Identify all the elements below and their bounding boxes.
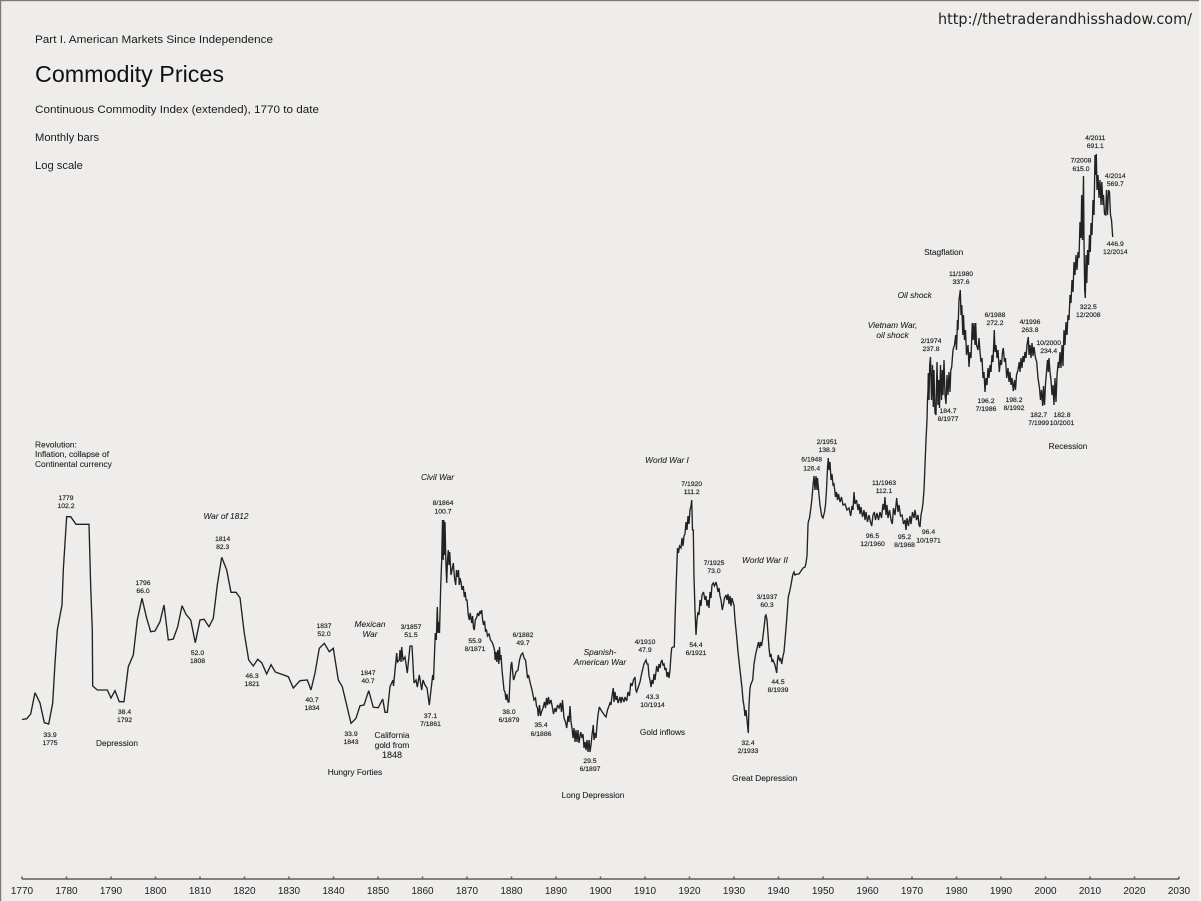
low label 2008 <box>1076 304 1101 319</box>
x axis: 1800 <box>144 886 167 897</box>
peak label 1948: 126.4 <box>803 466 820 472</box>
low label 1871 <box>465 638 486 653</box>
low label 1977: 8/1977 <box>938 416 959 423</box>
annotation: california gold <box>374 730 410 760</box>
low label 1999 <box>1028 412 1049 427</box>
peak label 1988: 6/1988 <box>985 312 1006 319</box>
peak label 1882: 49.7 <box>516 640 530 647</box>
low label 1977 <box>938 408 959 423</box>
peak label 1988: 272.2 <box>986 320 1004 327</box>
series label: Part I. American Markets Since Independence <box>35 34 273 46</box>
annotation: revolution: Revolution: <box>35 439 77 449</box>
x axis: 2020 <box>1123 886 1146 897</box>
peak label 1779 <box>57 495 75 510</box>
bar frequency note: Monthly bars <box>35 132 99 144</box>
annotation: vietnam war: Vietnam War, <box>868 320 917 330</box>
x axis: 1930 <box>723 886 746 897</box>
peak label 1948 <box>801 456 822 472</box>
peak label 1974 <box>921 338 942 353</box>
peak label 1937: 3/1937 <box>757 594 778 601</box>
peak label 2008: 7/2008 <box>1071 158 1092 164</box>
peak label 1937 <box>757 594 778 609</box>
peak label 1814 <box>215 536 230 551</box>
annotation: recession: Recession <box>1049 441 1088 451</box>
low label 1999: 7/1999 <box>1028 420 1049 427</box>
peak label 1882: 6/1882 <box>513 632 534 639</box>
annotation: revolution: Inflation, collapse of <box>35 449 110 459</box>
low label 1977: 184.7 <box>939 408 957 415</box>
peak label 1996: 4/1996 <box>1020 319 1041 326</box>
peak label 1864: 8/1864 <box>433 500 454 507</box>
peak label 2000: 10/2000 <box>1036 340 1061 347</box>
low label 1834: 1834 <box>304 705 320 712</box>
annotation: vietnam war <box>868 320 917 340</box>
last value label 2014: 446.9 <box>1107 241 1124 248</box>
last value label 2014 <box>1103 241 1128 256</box>
annotation: depression: Depression <box>96 738 138 748</box>
peak label 1910: 47.9 <box>638 647 652 654</box>
low label 2008: 322.5 <box>1080 304 1097 311</box>
low label 1843 <box>343 731 359 746</box>
x axis: 1950 <box>812 886 835 897</box>
annotation: mexican war: War <box>362 629 379 639</box>
annotation: mexican war <box>355 619 386 639</box>
low label 1999: 182.7 <box>1030 412 1047 419</box>
low label 1843: 1843 <box>343 739 359 746</box>
low label 1960: 96.5 <box>866 533 879 540</box>
low label 1843: 33.9 <box>344 731 358 738</box>
low label 1897: 29.5 <box>583 758 597 765</box>
low label 1871: 55.9 <box>468 638 482 645</box>
peak label 1847: 1847 <box>360 670 376 677</box>
x axis: 1980 <box>945 886 968 897</box>
x axis: 1790 <box>100 886 123 897</box>
low label 1914: 10/1914 <box>640 702 665 709</box>
peak label 1837 <box>316 623 332 638</box>
low label 1986 <box>976 398 997 413</box>
low label 1792: 38.4 <box>118 709 131 716</box>
low label 2001 <box>1050 412 1074 427</box>
low label 1968: 95.2 <box>898 534 911 541</box>
low label 1886: 6/1886 <box>531 731 552 738</box>
x axis: 1830 <box>278 886 301 897</box>
x axis: 1900 <box>589 886 612 897</box>
last value label 2014: 12/2014 <box>1103 249 1128 256</box>
low label 1808: 52.0 <box>191 650 204 657</box>
peak label 1882 <box>513 632 534 647</box>
annotation: spanish-american war: Spanish- <box>584 647 617 657</box>
peak label 1837: 1837 <box>316 623 332 630</box>
low label 1897: 6/1897 <box>580 766 601 773</box>
low label 1861 <box>420 713 441 728</box>
peak label 2014: 4/2014 <box>1105 173 1126 180</box>
low label 1986: 7/1986 <box>976 406 997 413</box>
annotation: spanish-american war <box>573 647 627 667</box>
low label 1834: 40.7 <box>305 697 319 704</box>
subtitle: Continuous Commodity Index (extended), 1770 to date <box>35 104 319 116</box>
peak label 1857: 51.5 <box>404 632 418 639</box>
peak label 1974: 237.8 <box>922 346 940 353</box>
low label 1921: 6/1921 <box>686 650 707 657</box>
peak label 2014 <box>1105 173 1126 188</box>
low label 1992: 198.2 <box>1005 397 1023 404</box>
x axis: 1850 <box>367 886 390 897</box>
low label 1939: 44.5 <box>771 679 785 686</box>
low label 1821 <box>244 673 260 688</box>
annotation: stagflation: Stagflation <box>924 247 964 257</box>
x axis <box>11 876 1191 897</box>
low label 1775 <box>42 732 58 747</box>
peak label 2000: 234.4 <box>1040 348 1057 355</box>
low label 1775: 33.9 <box>43 732 57 739</box>
peak label 1948: 6/1948 <box>801 456 822 464</box>
source url: http://thetraderandhisshadow.com/ <box>938 10 1193 28</box>
peak label 1864: 100.7 <box>434 508 452 516</box>
annotation: hungry forties: Hungry Forties <box>328 767 382 777</box>
low label 1933: 2/1933 <box>738 748 759 755</box>
x axis: 1780 <box>55 886 78 897</box>
low label 1897 <box>580 758 601 773</box>
peak label 2008: 615.0 <box>1072 166 1090 173</box>
annotation: revolution <box>35 439 113 469</box>
peak label 1910 <box>635 639 656 654</box>
low label 1821: 1821 <box>244 681 260 688</box>
peak label 1963: 112.1 <box>876 488 892 495</box>
x axis: 1970 <box>901 886 924 897</box>
annotation: world war i: World War I <box>645 455 690 465</box>
annotation: vietnam war: oil shock <box>876 330 909 340</box>
x axis: 2030 <box>1168 886 1191 897</box>
header block <box>35 34 319 172</box>
low label 1792 <box>117 709 132 724</box>
x axis: 2010 <box>1079 886 1102 897</box>
peak label 1796: 66.0 <box>136 588 150 595</box>
peak label 2011: 4/2011 <box>1085 135 1106 142</box>
low label 1968: 8/1968 <box>894 542 915 549</box>
peak label 1814: 82.3 <box>216 544 230 551</box>
low label 1792: 1792 <box>117 717 132 724</box>
low label 1986: 196.2 <box>977 398 995 405</box>
low label 1871: 8/1871 <box>465 646 486 653</box>
annotation: revolution: Continental currency <box>35 459 113 469</box>
x axis: 1910 <box>634 886 657 897</box>
annotation: california gold: gold from <box>375 740 409 750</box>
peak label 1951 <box>817 439 838 454</box>
low label 1861: 7/1861 <box>420 721 441 728</box>
annotation: california gold: California <box>374 730 410 740</box>
x axis: 1890 <box>545 886 568 897</box>
peak label 1847: 40.7 <box>361 678 375 685</box>
peak label 1814: 1814 <box>215 536 230 543</box>
x axis: 1990 <box>990 886 1013 897</box>
peak label 1937: 60.3 <box>760 602 774 609</box>
x axis: 1940 <box>767 886 790 897</box>
low label 1914 <box>640 694 665 709</box>
low label 1886: 35.4 <box>534 722 548 729</box>
peak label 1920: 7/1920 <box>681 481 702 488</box>
low label 1971: 96.4 <box>922 529 935 536</box>
low label 1939: 8/1939 <box>768 687 789 694</box>
low label 2001: 10/2001 <box>1050 420 1074 427</box>
peak label 1857: 3/1857 <box>401 624 422 631</box>
peak label 1779: 1779 <box>58 495 74 502</box>
low label 2001: 182.8 <box>1053 412 1071 419</box>
peak label 1925: 73.0 <box>707 568 721 575</box>
annotation: mexican war: Mexican <box>355 619 386 629</box>
x axis: 1840 <box>322 886 345 897</box>
peak label 1796 <box>135 580 151 595</box>
low label 1861: 37.1 <box>424 713 437 720</box>
peak label 1951: 138.3 <box>818 447 836 454</box>
low label 1879 <box>499 709 520 724</box>
low label 1992: 8/1992 <box>1004 405 1025 412</box>
low label 1886 <box>531 722 552 738</box>
low label 1992 <box>1004 397 1025 412</box>
low label 1960: 12/1960 <box>860 541 885 548</box>
peak label 1864 <box>433 500 454 516</box>
low label 1775: 1775 <box>42 740 58 747</box>
peak label 1996 <box>1020 319 1041 334</box>
peak label 1963 <box>872 480 896 495</box>
price line chart <box>22 154 1113 752</box>
low label 1921: 54.4 <box>689 642 703 649</box>
low label 1933 <box>738 740 759 755</box>
low label 1879: 38.0 <box>502 709 516 716</box>
peak label 2011 <box>1085 135 1106 150</box>
annotation: oil shock: Oil shock <box>898 290 933 300</box>
x axis: 1860 <box>411 886 434 897</box>
peak label 1988 <box>985 312 1006 327</box>
low label 1971: 10/1971 <box>916 538 941 544</box>
annotation: spanish-american war: American War <box>573 657 627 667</box>
low label 1821: 46.3 <box>245 673 259 680</box>
peak label 2000 <box>1036 340 1061 355</box>
annotation: california gold: 1848 <box>382 750 402 760</box>
peak label 1837: 52.0 <box>317 631 331 638</box>
peak label 2008 <box>1071 158 1092 173</box>
title: Commodity Prices <box>35 61 224 87</box>
peak label 1779: 102.2 <box>57 503 75 510</box>
peak label 1857 <box>401 624 422 639</box>
peak label 1980: 11/1980 <box>949 271 973 278</box>
x axis: 1920 <box>678 886 701 897</box>
low label 1808: 1808 <box>190 658 205 665</box>
peak label 1847 <box>360 670 376 685</box>
annotation: civil war: Civil War <box>421 472 455 482</box>
low label 1968 <box>894 534 915 549</box>
x axis: 1870 <box>456 886 479 897</box>
annotation: war of 1812: War of 1812 <box>203 511 249 521</box>
x axis: 1820 <box>233 886 256 897</box>
peak label 1796: 1796 <box>135 580 151 587</box>
peak label 1951: 2/1951 <box>817 439 838 446</box>
peak label 2014: 569.7 <box>1107 181 1124 188</box>
low label 1960 <box>860 533 885 548</box>
annotation: gold inflows: Gold inflows <box>640 727 685 737</box>
annotation: long depression: Long Depression <box>562 790 625 800</box>
peak label 1910: 4/1910 <box>635 639 656 646</box>
low label 1921 <box>686 642 707 657</box>
x axis: 1880 <box>500 886 523 897</box>
low label 1939 <box>768 679 789 694</box>
peak label 2011: 691.1 <box>1087 143 1104 150</box>
peak label 1974: 2/1974 <box>921 338 942 345</box>
peak label 1980 <box>949 271 973 286</box>
peak label 1963: 11/1963 <box>872 480 896 487</box>
annotation: great depression: Great Depression <box>732 773 798 783</box>
x axis: 1810 <box>189 886 212 897</box>
low label 1914: 43.3 <box>646 694 659 701</box>
low label 1808 <box>190 650 205 665</box>
low label 1933: 32.4 <box>741 740 755 747</box>
peak label 1925: 7/1925 <box>704 560 725 567</box>
x axis: 2000 <box>1034 886 1057 897</box>
peak label 1980: 337.6 <box>952 279 970 286</box>
peak label 1920: 111.2 <box>684 489 700 496</box>
scale note: Log scale <box>35 160 83 172</box>
peak label 1996: 263.8 <box>1021 327 1039 334</box>
low label 1971 <box>916 529 941 544</box>
x axis: 1960 <box>856 886 879 897</box>
low label 1879: 6/1879 <box>499 717 520 724</box>
low label 2008: 12/2008 <box>1076 312 1101 319</box>
peak label 1920 <box>681 481 702 496</box>
peak label 1925 <box>704 560 725 575</box>
low label 1834 <box>304 697 320 712</box>
annotation: world war ii: World War II <box>742 555 789 565</box>
x axis: 1770 <box>11 886 34 897</box>
